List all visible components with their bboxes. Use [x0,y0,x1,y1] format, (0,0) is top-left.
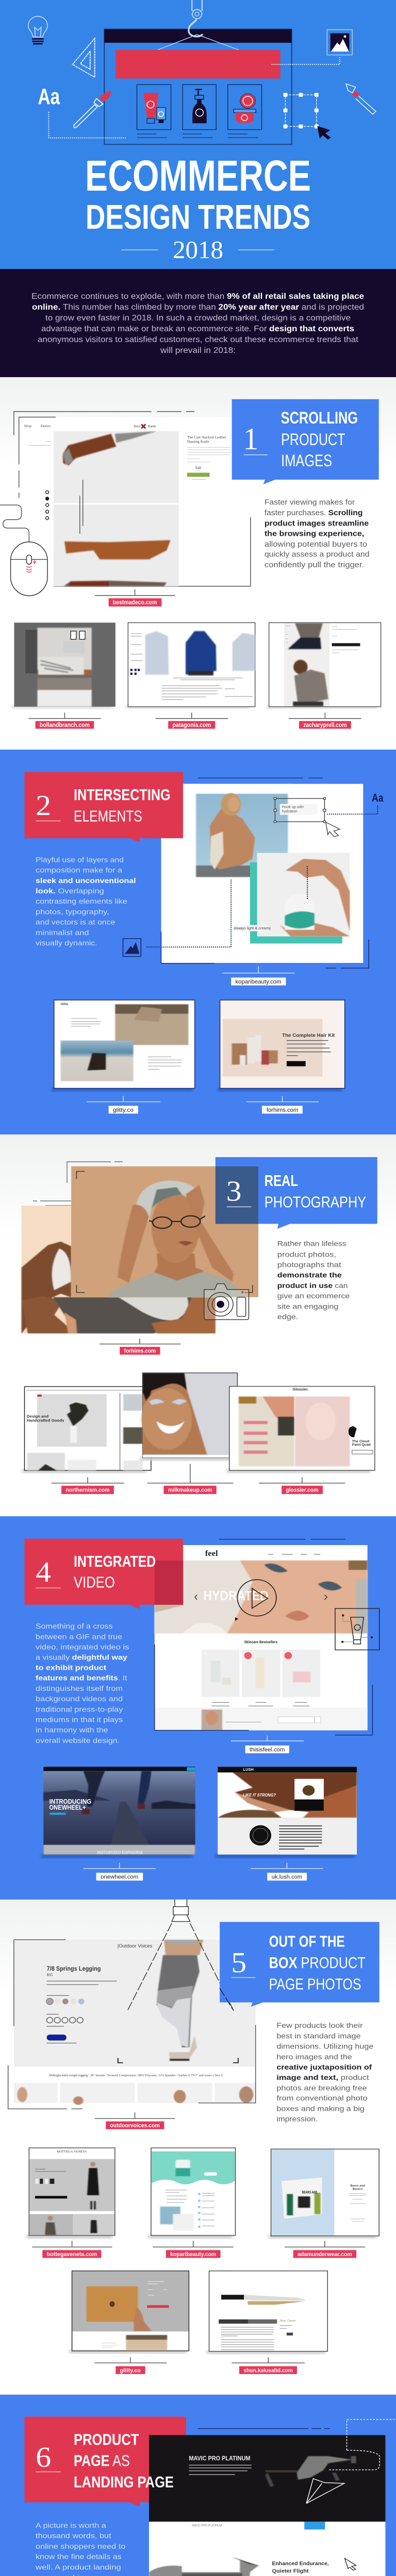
body text 2: and vectors is at once [36,919,115,926]
section 2: intersecting elements [0,750,396,1134]
heading badge 4 [25,1539,183,1609]
main screenshot: www.dji.com [149,2419,395,2576]
screenshot: glossier.com: Paint Quad [352,1443,371,1447]
icon: Aa with dotted connector: Aa [372,791,384,804]
main screenshot: outdoorvoices.com: Midnight ankle-length legging / 28" inseam / Textured Compression / 88% Polyester, 12% Spandex / Sophie is 5'9.5" and wears a Size S [49,2074,223,2077]
main screenshot: bestmadeco.com: Made [148,425,156,429]
heading badge 1: IMAGES [281,451,332,470]
body text 4: overall website design. [36,1737,120,1745]
body text 3 [277,1240,350,1321]
main screenshot: koparibeauty.com: hydration [282,809,298,814]
icon: set square [73,39,95,77]
main screenshot: bestmadeco.com: The Cast Stacked Leather [187,435,226,439]
body text 3: edge. [277,1313,298,1321]
caption: patagonia.com: patagonia.com [173,721,211,728]
heading badge 1 [232,399,379,484]
icon: pen nib [346,84,376,114]
caption: onewheel.com [84,1863,156,1880]
main screenshot: thisisfeel.com: Skincare Bestsellers [244,1640,277,1645]
body text 5: boxes and making a big [276,2105,365,2113]
body text 4: in harmony with the [36,1726,108,1735]
year: 2018 [173,235,223,264]
caption: outdoorvoices.com: outdoorvoices.com [110,2123,160,2129]
heading badge 2: INTERSECTING [74,786,171,804]
main screenshot: www.dji.com: Enhanced Endurance, [272,2561,329,2567]
body text 6: online shoppers need to [36,2543,125,2551]
screenshot: northernism.com: Handcrafted Goods [27,1418,64,1422]
screenshot: glossier.com: Glossier. [292,1387,308,1392]
main screenshot: bestmadeco.com [14,412,251,586]
heading badge 6 text: LANDING PAGE [74,2473,174,2491]
body text 4: between a GIF and true [36,1633,122,1641]
icon: image placeholder with dotted connector [123,879,231,957]
title: DESIGN TRENDS [86,198,310,236]
body text 6 [35,2522,134,2576]
heading badge 6 text: PAGE AS [74,2452,130,2469]
main screenshot: www.dji.com: Quieter Flight [272,2569,309,2574]
main screenshot: bestmadeco.com: Stories [40,425,51,428]
body text 1: allowing potential buyers to [265,540,367,549]
screenshot: bottegaveneta.com [26,2148,115,2239]
hero illustration: website window on a crane hook [104,0,292,144]
caption: glitty.co product page: glitty.co [120,2368,141,2374]
body text 5 [276,2022,373,2123]
body text 5: impression. [276,2115,318,2123]
section 1: scrolling product images [0,377,396,750]
screenshot: adamunderwear.com: Beers and [350,2184,365,2188]
main screenshot: bestmadeco.com: $48 [195,466,201,470]
body text 5: photos are breaking free [276,2084,367,2092]
icon: paint brush [74,91,111,128]
screenshot: bottegaveneta.com: BOTTEGA VENETA [57,2150,87,2154]
body text 4: Something of a cross [36,1623,112,1631]
body text 3: site an engaging [277,1303,338,1311]
caption: patagonia.com [156,713,228,728]
body text 1: product images streamline [265,519,369,528]
caption: koparibeauty.com: koparibeauty.com [235,979,282,985]
main screenshot: outdoorvoices.com: 7/8 Springs Legging [47,1965,101,1972]
caption: bottegaveneta.com: bottegaveneta.com [47,2251,97,2258]
icon: spotlight with dashed beam [127,1900,234,2011]
body text 6: thousand words, but [36,2532,111,2540]
body text 6: know the fine details as [36,2553,122,2561]
heading badge 4: 4 [36,1556,51,1588]
caption: bestmadeco.com: bestmadeco.com [113,599,157,606]
screenshot: zacharyprell.com [267,623,381,709]
caption: bottegaveneta.com [32,2241,112,2258]
screenshot: northernism.com [22,1386,151,1473]
caption: shun.kaiusaltd.com: shun.kaiusaltd.com [243,2368,293,2374]
intro panel [0,269,396,377]
caption: forhims.com: forhims.com [124,1348,156,1354]
heading badge 3: 3 [226,1175,241,1207]
body text 1: faster purchases. Scrolling [265,509,362,517]
icon: camera [204,1284,249,1319]
main screenshot: bestmadeco.com: Shop [24,425,32,428]
body text 2: sleek and unconventional [36,877,136,885]
heading badge 6 text: PRODUCT [74,2431,139,2448]
main screenshot: www.dji.com: MAVIC PRO PLATINUM [189,2455,250,2462]
main screenshot: thisisfeel.com [155,1539,372,1735]
caption: adamunderwear.com: adamunderwear.com [298,2251,352,2258]
caption: thisisfeel.com [231,1736,304,1753]
body text 3: give an ecommerce [277,1293,350,1300]
heading badge 5: 5 [231,1946,246,1978]
body text 5: image and text, product [276,2074,369,2082]
body text 5: Few products look their [276,2022,362,2030]
screenshot: glossier.com [227,1386,375,1473]
body text 2: composition make for a [36,867,123,874]
screenshot: adamunderwear.com: BEARS AND [302,2191,317,2195]
heading badge 1: SCROLLING [281,409,358,427]
heading badge 3: PHOTOGRAPHY [265,1193,366,1211]
caption: glitty.co: glitty.co [113,1107,134,1113]
body text 1: Faster viewing makes for [265,499,355,507]
body text 5: best in standard image [276,2032,360,2040]
intro panel: advantage that can make or break an ecommerce site. For design that converts [41,325,354,333]
heading badge 4: VIDEO [74,1574,115,1591]
caption: uk.lush.com [251,1863,323,1880]
body text 2: look. Overlapping [36,887,104,895]
screenshot: adamunderwear.com [269,2149,379,2239]
body text 6: A picture is worth a [36,2522,107,2530]
main screenshot: koparibeauty.com: Hook up with [282,805,304,809]
caption: thisisfeel.com: thisisfeel.com [250,1747,285,1753]
screenshot: shun.kaiusaltd.com [207,2271,327,2354]
body text 1 [265,499,370,569]
screenshot: uk.lush.com: LUSH [243,1768,254,1772]
caption: milkmakeup.com [147,1464,234,1494]
body text 3: photographs that [277,1261,341,1269]
screenshot: uk.lush.com [216,1767,357,1858]
main screenshot: bestmadeco.com: Best [134,425,141,429]
screenshot: glitty.co [52,1000,195,1091]
body text 4: features and benefits. It [36,1674,127,1683]
icon: tube with wireframe box [335,1608,380,1650]
caption: northernism.com: northernism.com [65,1487,110,1494]
caption: bollandbranch.com: bollandbranch.com [40,721,90,728]
body text 1: quickly assess a product and [265,551,370,559]
screenshot: onewheel.com: INTRODUCING [50,1798,91,1805]
main screenshot: outdoorvoices.com: $95 [47,1973,53,1977]
caption: bollandbranch.com [28,713,101,728]
icon: Aa with dotted connector [327,791,384,814]
intro panel: will prevail in 2018: [160,346,236,355]
main screenshot: koparibeauty.com [161,784,369,968]
body text 1: the browsing experience, [265,530,364,538]
heading badge 6 text [36,2431,174,2491]
body text 2 [36,856,136,947]
heading badge 1: 1 [243,421,258,456]
body text 5: creative juxtaposition of [276,2063,372,2072]
section 3: real photography [0,1134,396,1516]
screenshot: forhims.com: The Complete Hair Kit [282,1033,335,1039]
screenshot: koparibeauty.com product page [148,2148,235,2239]
caption: glitty.co [87,1096,160,1114]
title [85,151,311,236]
body text 2: photos, typography, [36,908,109,916]
heading badge 5: OUT OF THE [269,1933,345,1950]
heading badge 2 [25,772,183,842]
icon: Aa type: Aa [38,84,60,109]
caption: outdoorvoices.com [95,2112,175,2129]
intro panel: Ecommerce continues to explode, with more than 9% of all retail sales taking place [31,292,364,301]
heading badge 1: PRODUCT [281,430,345,449]
icon: Aa type [38,84,126,138]
screenshot: bollandbranch.com [12,623,116,709]
heading badge 2: ELEMENTS [74,807,142,825]
intro panel: online. This number has climbed by more than 20% year after year and is projected [32,303,364,312]
section 5: out of the box product page photos [0,1900,396,2395]
screenshot: glitty.co: Glitty [61,1003,69,1006]
body text 6: well. A product landing [35,2564,121,2571]
caption: uk.lush.com: uk.lush.com [272,1874,302,1880]
body text 4: a visually delightful way [36,1654,128,1662]
body text 4: video, integrated video is [36,1643,129,1651]
body text 4 [36,1623,129,1745]
screenshot: northernism.com: Design and [27,1414,48,1418]
body text 3: product in use can [277,1282,348,1290]
body text 4: mediums in that it plays [36,1716,123,1724]
heading badge 4: INTEGRATED [74,1553,156,1570]
body text 5: from conventional photo [276,2095,368,2103]
screenshot: patagonia.com [125,623,255,709]
body text 2: contrasting elements like [36,898,127,906]
screenshot: milkmakeup.com [140,1373,237,1461]
main screenshot: thisisfeel.com: feel [205,1550,218,1558]
body text 4: to exhibit product [36,1664,106,1672]
main screenshot: www.dji.com: MAVIC PRO PLATINUM [192,2524,222,2528]
hero section [0,0,396,269]
icon: computer mouse [0,505,47,596]
heading badge 5 [220,1922,380,2011]
intro panel: to grow even faster in 2018. In such a crowded market, design is a competitive [45,314,351,323]
screenshot: uk.lush.com: LIKE IT STRONG? [243,1792,276,1798]
caption: forhims.com [100,1338,180,1354]
icon: selection box and cursor [284,93,331,140]
body text 4: background videos and [36,1695,123,1703]
screenshot: adamunderwear.com: Boxers [353,2188,363,2191]
caption: forhims.com: forhims.com [267,1107,298,1113]
caption: glossier.com [259,1477,345,1494]
caption: adamunderwear.com [285,2241,365,2258]
section 4: integrated video [0,1516,396,1900]
intro panel: anonymous visitors to satisfied customers, check out these ecommerce trends that [38,335,359,344]
caption: koparibeauty.com product page [153,2241,234,2258]
heading badge 6 backdrop [25,2417,186,2506]
screenshot: onewheel.com [41,1767,195,1858]
screenshot: shun.kaiusaltd.com: Shun Classic [280,2319,296,2323]
caption: northernism.com [51,1477,124,1494]
screenshot: glitty.co product page [70,2271,189,2353]
caption: koparibeauty.com [222,967,295,986]
caption: zacharyprell.com [289,713,361,728]
heading badge 5: PAGE PHOTOS [269,1975,361,1993]
screenshot: forhims.com [218,1000,345,1091]
icon: framed picture with dotted connector [272,30,352,64]
caption: bestmadeco.com [95,589,175,606]
heading badge 3 [216,1157,377,1229]
caption: glitty.co product page [94,2357,167,2374]
heading badge 6 text: 6 [36,2441,51,2473]
screenshot: glossier.com: The Cloud [352,1439,369,1443]
body text 4: distinguishes itself from [36,1685,123,1693]
body text 3: demonstrate the [277,1272,342,1280]
screenshot: onewheel.com: ONEWHEEL+ [50,1804,86,1811]
caption: koparibeauty.com product page: koparibeauty.com [170,2251,216,2258]
heading badge 3: REAL [265,1172,298,1190]
hero photo: forhims shampoo photos [22,1166,258,1333]
body text 4: traditional press-to-play [36,1706,123,1714]
caption: glossier.com: glossier.com [286,1487,318,1494]
body text 2: visually dynamic. [36,939,97,947]
main screenshot: thisisfeel.com: HYDRATED [203,1588,269,1603]
body text 1: confidently pull the trigger. [265,561,364,569]
caption: milkmakeup.com: milkmakeup.com [168,1487,212,1494]
heading badge 5: BOX PRODUCT [269,1954,366,1972]
body text 2: minimalist and [36,929,89,937]
main screenshot: bestmadeco.com: Hunting Knife [187,439,209,444]
caption: onewheel.com: onewheel.com [101,1874,138,1880]
caption: zacharyprell.com: zacharyprell.com [303,721,346,728]
caption: forhims.com [246,1096,319,1114]
icon: light bulb [28,16,47,44]
main screenshot: koparibeauty.com: Always light & creamy [234,926,271,930]
caption: shun.kaiusaltd.com [232,2357,305,2374]
main screenshot: outdoorvoices.com: |Outdoor Voices [118,1943,152,1949]
body text 3: Rather than lifeless [277,1240,346,1248]
heading badge 2: 2 [36,789,51,822]
section 6: product page as landing page [0,2395,396,2576]
title: ECOMMERCE [85,151,311,200]
body text 3: product photos, [277,1251,336,1259]
body text 2: Playful use of layers and [36,856,124,864]
body text 5: dimensions. Utilizing huge [276,2043,373,2051]
body text 5: hero images and the [276,2053,352,2061]
main screenshot: outdoorvoices.com [8,1940,256,2109]
screenshot: onewheel.com: MOTORIZED EUPHORIA [97,1851,143,1855]
